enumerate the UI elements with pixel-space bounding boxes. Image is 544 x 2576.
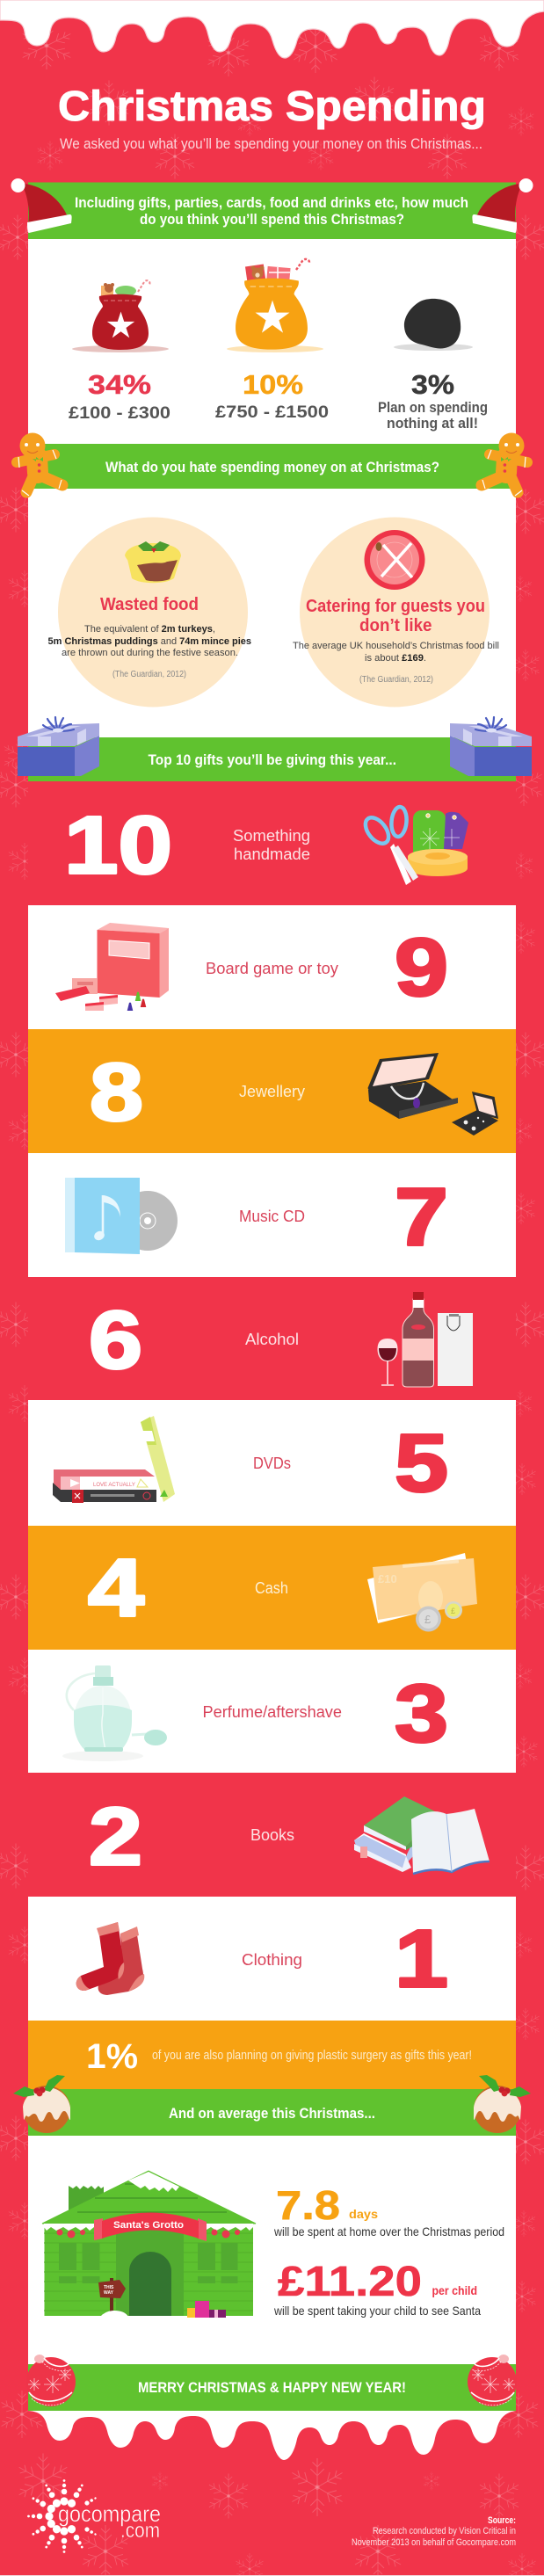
caption: Plan on spending xyxy=(378,399,488,416)
citation: (The Guardian, 2012) xyxy=(112,670,186,679)
label: Music CD xyxy=(239,1207,305,1225)
banner: hate spending xyxy=(28,444,516,489)
callout: plastic surgery xyxy=(28,2021,516,2089)
label: Something xyxy=(233,826,310,845)
source text: Research conducted by Vision Critical in xyxy=(373,2526,516,2536)
row 8: jewellery xyxy=(28,1029,516,1153)
icon: gingerbread right xyxy=(482,432,527,496)
banner text: MERRY CHRISTMAS & HAPPY NEW YEAR! xyxy=(138,2380,406,2396)
icon: orange sack xyxy=(227,259,323,352)
row 3: perfume xyxy=(28,1650,516,1773)
body text: are thrown out during the festive season. xyxy=(62,648,238,658)
stat: 3%: 3% xyxy=(411,369,454,400)
label: Cash xyxy=(255,1578,288,1597)
stat: 7.8 days xyxy=(273,2182,504,2239)
icon: pudding left xyxy=(13,2075,70,2133)
circle: catering xyxy=(293,517,499,707)
icon: perfume xyxy=(62,1665,167,1761)
illustration: Santa's Grotto xyxy=(42,2171,256,2318)
banner text: do you think you’ll spend this Christmas? xyxy=(140,212,404,228)
icon: socks xyxy=(76,1922,144,1995)
row 6: alcohol xyxy=(28,1277,516,1400)
amount: £100 - £300 xyxy=(69,404,170,423)
stat: £11.20 per child xyxy=(273,2259,481,2318)
icon: wine and bag xyxy=(378,1292,473,1387)
label: Books xyxy=(250,1825,294,1844)
row 1: clothing xyxy=(28,1897,516,2021)
banner text: And on average this Christmas... xyxy=(169,2106,375,2122)
banner: how much xyxy=(28,183,516,239)
icon: santa hat left xyxy=(11,178,72,233)
snow drips top xyxy=(0,0,544,58)
panel: averages xyxy=(28,2136,516,2364)
icon: pudding right xyxy=(474,2075,531,2133)
heading: don’t like xyxy=(359,616,432,635)
body text: is about £169. xyxy=(365,653,426,664)
sign text: Santa's Grotto xyxy=(113,2220,184,2231)
number: 7 xyxy=(395,1171,448,1262)
banner: merry christmas xyxy=(28,2364,516,2411)
citation: (The Guardian, 2012) xyxy=(359,675,433,685)
icon: DVD stack xyxy=(53,1416,175,1503)
source text: November 2013 on behalf of Gocompare.com xyxy=(352,2537,516,2548)
unit: per child xyxy=(432,2283,477,2297)
stat: £11.20 per child: £11.20 xyxy=(278,2259,422,2305)
icon: bauble right xyxy=(468,2340,517,2406)
number: 3 xyxy=(395,1668,448,1760)
unit: days xyxy=(349,2207,378,2221)
logo mark xyxy=(27,2479,98,2553)
snow drips bottom xyxy=(28,2411,516,2460)
logo wordmark: .com xyxy=(120,2519,160,2543)
body text: 5m Christmas puddings and 74m mince pies xyxy=(47,636,251,647)
row 10: something handmade xyxy=(28,781,516,905)
banner: top 10 xyxy=(28,737,516,781)
title: Christmas Spending xyxy=(58,83,486,130)
illustration: Santa's Grotto: THIS xyxy=(104,2285,114,2290)
icon: notes and coins: £ xyxy=(424,1613,432,1626)
number: 8 xyxy=(90,1046,143,1137)
row 9: board game xyxy=(28,905,516,1029)
icon: jewellery boxes xyxy=(367,1053,498,1136)
banner text: Top 10 gifts you’ll be giving this year... xyxy=(148,752,396,768)
number: 1 xyxy=(395,1912,448,2004)
number: 6 xyxy=(89,1294,142,1385)
stat: 34% xyxy=(69,369,170,423)
icon: gift left xyxy=(18,717,99,776)
description: will be spent taking your child to see Santa xyxy=(273,2304,481,2318)
icon: notes and coins: £ xyxy=(451,1607,455,1615)
logo: gocompare.com xyxy=(27,2479,161,2553)
icon: CD xyxy=(65,1178,178,1254)
label: Board game or toy xyxy=(206,959,339,977)
caption: nothing at all! xyxy=(387,415,478,432)
label: Perfume/aftershave xyxy=(202,1702,342,1721)
stat: 10%: 10% xyxy=(243,369,303,400)
circle: wasted food xyxy=(47,517,251,707)
icon: books xyxy=(354,1796,490,1874)
panel: spending question xyxy=(11,178,533,444)
icon: santa hat right xyxy=(472,178,533,233)
icon: DVD stack: LOVE ACTUALLY xyxy=(93,1483,135,1488)
icon: gingerbread left xyxy=(17,432,62,496)
row 4: cash xyxy=(28,1526,516,1650)
stat: 3% xyxy=(378,369,488,432)
label: Alcohol xyxy=(245,1330,299,1348)
logo wordmark: gocompare xyxy=(58,2500,161,2527)
icon: notes and coins: £10 xyxy=(378,1572,397,1586)
row 2: books xyxy=(28,1773,516,1897)
panel: what do you hate xyxy=(17,432,527,737)
subtitle: We asked you what you’ll be spending your money on this Christmas... xyxy=(60,136,482,152)
icon: notes and coins xyxy=(367,1553,477,1631)
label: Jewellery xyxy=(239,1082,306,1100)
row 7: music CD xyxy=(28,1153,516,1277)
number: 10 xyxy=(64,800,172,891)
white panel background xyxy=(28,489,516,737)
body text: The average UK household’s Christmas food bill xyxy=(293,641,499,651)
label: handmade xyxy=(234,845,310,863)
heading: Wasted food xyxy=(100,595,199,614)
number: 9 xyxy=(395,921,448,1012)
row 5: DVDs xyxy=(28,1400,516,1526)
icon: gift right xyxy=(450,717,532,776)
amount: £750 - £1500 xyxy=(215,403,329,422)
stat: 7.8 days: 7.8 xyxy=(276,2182,340,2228)
body text: The equivalent of 2m turkeys, xyxy=(84,624,215,635)
stat: 34%: 34% xyxy=(88,369,151,400)
number: 2 xyxy=(89,1791,142,1883)
icon: plate xyxy=(364,530,425,590)
icon: bauble left xyxy=(26,2340,76,2406)
sentence: of you are also planning on giving plastic surgery as gifts this year! xyxy=(152,2048,472,2063)
icon: scissors and tags xyxy=(361,806,468,885)
percentage: 1% xyxy=(86,2037,138,2076)
description: will be spent at home over the Christmas period xyxy=(273,2224,504,2239)
source note xyxy=(352,2515,516,2548)
illustration: Santa's Grotto: WAY xyxy=(104,2290,114,2296)
number: 5 xyxy=(395,1417,448,1508)
heading: Catering for guests you xyxy=(306,597,485,616)
stat: 10% xyxy=(215,369,329,422)
source note: Source: xyxy=(488,2515,516,2526)
banner text: What do you hate spending money on at Christmas? xyxy=(105,460,439,475)
icon: mince pie xyxy=(125,541,181,583)
banner: and on average xyxy=(28,2089,516,2136)
white panel background xyxy=(28,239,516,444)
banner text: Including gifts, parties, cards, food and drinks etc, how much xyxy=(75,195,468,211)
icon: red sack xyxy=(72,280,169,352)
icon: coal xyxy=(394,299,473,351)
label: DVDs xyxy=(253,1454,291,1472)
number: 4 xyxy=(88,1542,144,1633)
label: Clothing xyxy=(242,1950,302,1969)
icon: board game xyxy=(55,923,169,1011)
